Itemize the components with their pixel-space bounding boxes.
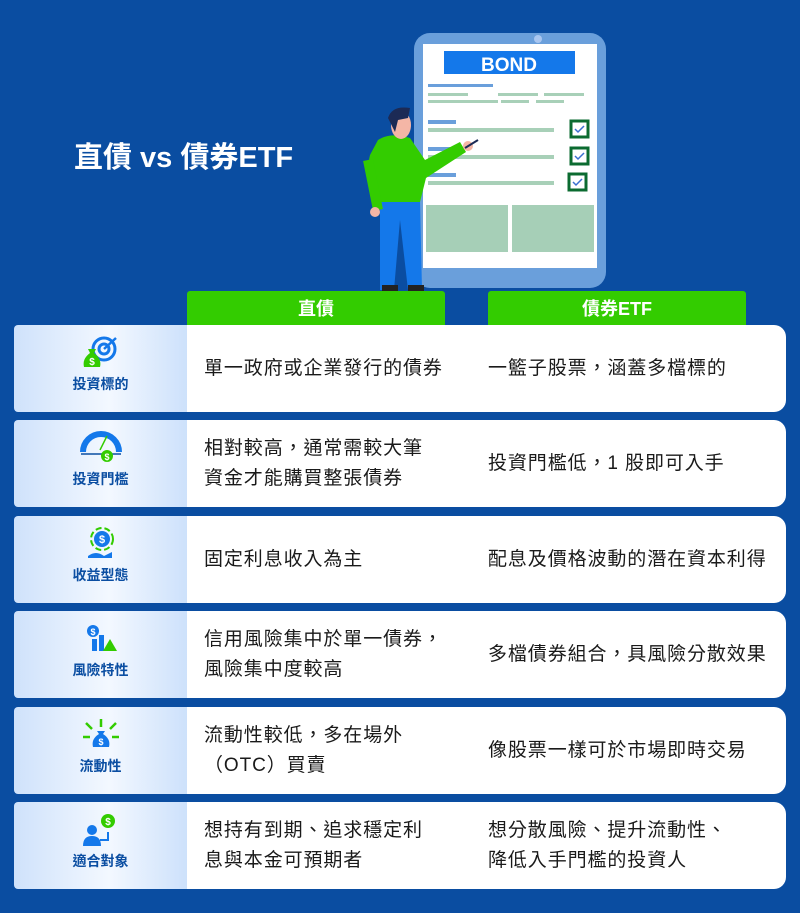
row: 適合對象: 息與本金可預期者 [204,850,363,870]
title: 直債 vs 債券ETF [74,142,293,174]
header tab: 直債 [187,291,445,325]
header tab: 債券ETF [488,291,746,325]
row: 收益型態 [14,516,786,603]
row: 投資標的: 一籃子股票，涵蓋多檔標的 [488,358,727,378]
row: 適合對象: 想持有到期、追求穩定利 [204,820,423,840]
row: 流動性: 像股票一樣可於市場即時交易 [488,740,747,760]
illustration: tablet bond with man [363,33,606,291]
row: 收益型態: $ [99,534,105,546]
row: 風險特性: 信用風險集中於單一債券， [204,628,443,650]
illustration: tablet bond with man: BOND [481,55,537,76]
row: 風險特性: $ [90,627,96,637]
row: 風險特性: 多檔債券組合，具風險分散效果 [488,644,767,664]
row: 投資門檻: 相對較高，通常需較大筆 [204,438,423,458]
row: 流動性: $ [98,737,104,747]
row: 適合對象: 想分散風險、提升流動性、 [488,820,727,840]
row: 投資標的: 單一政府或企業發行的債券 [204,358,443,378]
row: 適合對象: 適合對象 [72,853,128,869]
row: 投資標的: 投資標的 [72,376,128,392]
row: 流動性: （OTC）買賣 [204,754,326,776]
header tab: 債券ETF: 債券ETF [582,299,652,319]
row: 投資標的: $ [89,357,95,368]
row: 適合對象: 降低入手門檻的投資人 [488,850,687,870]
row: 投資門檻: 資金才能購買整張債券 [204,468,403,488]
row: 流動性: 流動性 [80,758,122,774]
row: 投資門檻: 投資門檻 [72,471,128,487]
row: 投資標的 [14,325,786,412]
row: 投資門檻: $ [104,452,110,462]
row: 風險特性: 風險特性 [72,662,128,678]
row: 收益型態: 收益型態 [72,567,128,583]
row: 收益型態: 配息及價格波動的潛在資本利得 [488,548,767,570]
row: 適合對象: $ [105,817,111,828]
row: 風險特性: 風險集中度較高 [204,658,343,680]
row: 適合對象 [14,802,786,889]
row: 投資門檻 [14,420,786,507]
row: 風險特性 [14,611,786,698]
row: 流動性: 流動性較低，多在場外 [204,724,403,746]
row: 收益型態: 固定利息收入為主 [204,548,363,570]
header tab: 直債: 直債 [298,299,334,319]
row: 流動性 [14,707,786,794]
row: 投資門檻: 投資門檻低，1 股即可入手 [488,452,725,474]
